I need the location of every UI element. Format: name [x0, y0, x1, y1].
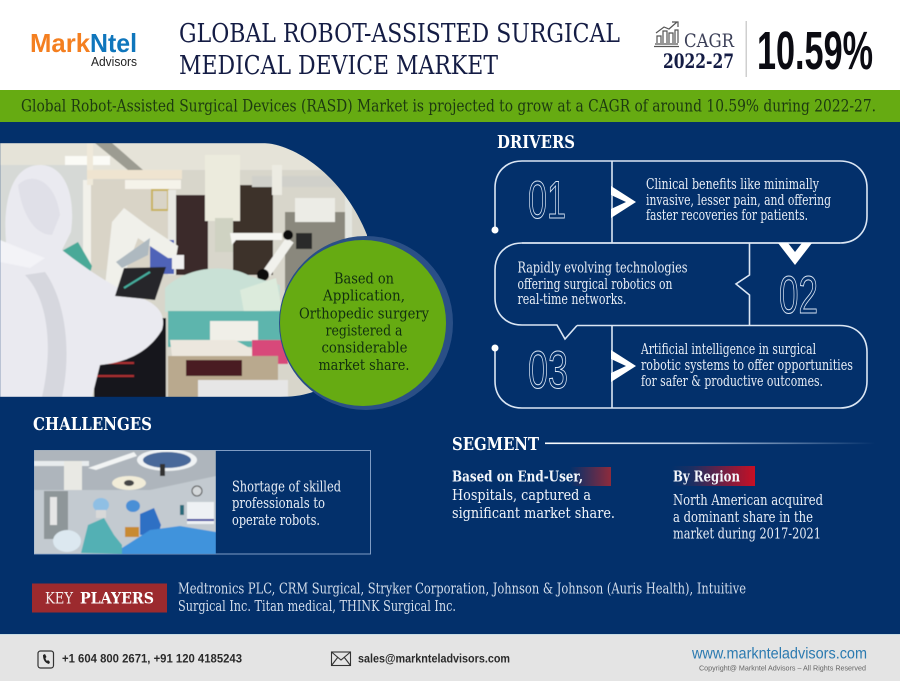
region segment: a dominant share in the [673, 510, 813, 526]
end-user segment [452, 468, 615, 522]
callout: application segment: Application, [322, 287, 405, 305]
panel: segment [452, 434, 875, 542]
logo: Advisors [91, 55, 137, 69]
driver 02 [495, 243, 840, 339]
phone numbers: +1 604 800 2671, +91 120 4185243 [62, 654, 242, 666]
region segment: market during 2017-2021 [673, 526, 821, 542]
driver 03: Artificial intelligence in surgical [640, 342, 816, 358]
panel: challenges [34, 449, 370, 554]
photo: operating theatre [34, 449, 216, 554]
callout: application segment: registered a [326, 322, 403, 340]
driver 03: for safer & productive outcomes. [641, 374, 823, 390]
key players label [32, 584, 167, 612]
CAGR label: 2022-27 [663, 49, 734, 73]
driver 02: offering surgical robotics on [518, 277, 672, 293]
title: GLOBAL ROBOT-ASSISTED SURGICAL [179, 18, 620, 49]
robot arm [150, 240, 174, 274]
end-user segment: significant market share. [452, 506, 615, 522]
callout: application segment [279, 236, 453, 410]
title: MEDICAL DEVICE MARKET [179, 50, 498, 81]
region segment [673, 468, 823, 542]
driver 02: real-time networks. [518, 292, 626, 308]
key players label: KEY [45, 588, 73, 608]
driver 01 [492, 161, 867, 243]
heading: drivers: DRIVERS [497, 132, 575, 153]
tablet [115, 267, 166, 300]
papers and stack [169, 339, 252, 356]
driver 01: faster recoveries for patients. [646, 208, 808, 224]
copyright: Copyright@ Markntel Advisors – All Rights Reserved [699, 664, 866, 672]
logo [30, 28, 137, 69]
key players label: PLAYERS [80, 588, 154, 608]
driver 03: 03 [528, 341, 568, 400]
driver 02: Rapidly evolving technologies [518, 261, 688, 277]
driver 01: invasive, lesser pain, and offering [646, 193, 831, 209]
summary banner [0, 90, 900, 122]
callout: application segment: considerable [322, 339, 408, 357]
driver 01: 01 [528, 171, 566, 230]
heading: challenges: CHALLENGES [33, 414, 152, 435]
CAGR label: CAGR [684, 30, 735, 52]
dark equipment [94, 318, 166, 397]
end-user segment: Based on End-User, [452, 468, 583, 486]
icon: phone [38, 651, 54, 668]
region segment: By Region [673, 468, 740, 486]
sheets on the table [165, 268, 280, 312]
logo: Ntel [90, 28, 137, 58]
panel: challenges: Shortage of skilled [232, 480, 341, 496]
website: www.marknteladvisors.com [691, 646, 867, 662]
driver 01: Clinical benefits like minimally [646, 177, 820, 193]
panel: challenges: operate robots. [232, 513, 320, 529]
page background [0, 122, 900, 635]
region segment: North American acquired [673, 493, 823, 509]
driver 03 [492, 326, 867, 408]
footer [0, 634, 900, 681]
icon: mail [332, 652, 350, 666]
callout: application segment: Orthopedic surgery [299, 304, 429, 322]
panel: drivers [492, 161, 867, 408]
driver 02: 02 [779, 266, 818, 325]
title [179, 18, 620, 81]
panel: key players [32, 582, 746, 615]
suited operator [0, 165, 163, 397]
microscope arm [230, 233, 282, 245]
teal tray [168, 311, 282, 347]
heading: segment: SEGMENT [452, 434, 539, 455]
end-user segment: Hospitals, captured a [452, 488, 591, 504]
photo: robotic surgery room [0, 143, 370, 397]
icon: growth chart [654, 22, 679, 46]
callout: application segment: Based on [334, 269, 394, 287]
CAGR label [663, 30, 735, 73]
logo: Mark [30, 28, 91, 58]
panel: key players: Medtronics PLC, CRM Surgical, Stryker Corporation, Johnson & Johnson (Auris Health), Intuitive [178, 582, 746, 598]
callout: application segment: market share. [318, 356, 410, 374]
header [30, 18, 873, 81]
email: sales@marknteladvisors.com [358, 654, 510, 666]
panel: challenges: professionals to [232, 496, 325, 512]
panel: key players: Surgical Inc. Titan medical, THINK Surgical Inc. [178, 599, 456, 615]
